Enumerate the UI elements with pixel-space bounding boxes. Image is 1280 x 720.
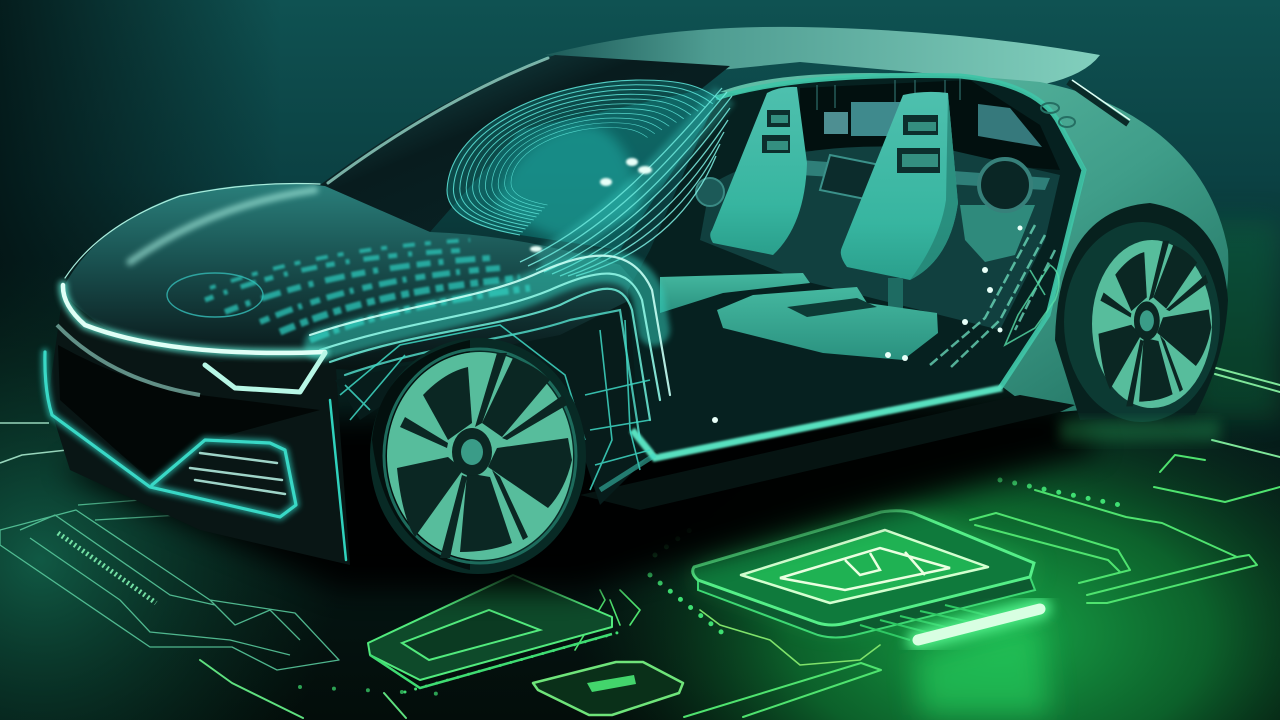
screen right	[978, 104, 1042, 147]
translucent dome of airflow	[447, 80, 732, 276]
sill	[580, 395, 1075, 510]
left outline drawing: mechanical part	[0, 423, 339, 670]
rear wheel arch and wheel	[1055, 203, 1228, 422]
grille louvres	[190, 453, 285, 494]
door frame	[716, 75, 1084, 388]
front wheel	[370, 338, 586, 574]
door circuitry	[930, 225, 1055, 368]
small chip outline	[533, 662, 683, 715]
light glow reflected below the bar	[915, 620, 1050, 715]
top wires	[817, 78, 960, 110]
headlight lamp	[205, 353, 325, 392]
front wiring around the wheel arch	[340, 320, 655, 490]
headlight and light strips	[45, 285, 346, 560]
dash console	[820, 155, 880, 200]
glowing light bar	[918, 608, 1040, 640]
headlight strip	[63, 285, 325, 353]
seat: right backrest	[841, 92, 958, 280]
dashboard	[700, 147, 1060, 330]
circuit traces on the floor	[200, 365, 1280, 718]
black grille	[58, 345, 320, 480]
roof and spoiler	[545, 27, 1100, 84]
floor reflection under rear wheel	[1060, 420, 1220, 442]
chrome trim under the hood	[57, 325, 200, 395]
seat: left cushion	[660, 273, 810, 313]
seat: left backrest	[710, 87, 807, 255]
tail glass outline	[1005, 265, 1059, 345]
screen middle	[851, 102, 906, 136]
body edge line	[330, 400, 346, 560]
rear vent and body detail	[1041, 80, 1130, 127]
bumper strip	[45, 352, 296, 517]
bumper strip glow	[45, 352, 296, 517]
hood highlight	[130, 190, 315, 262]
car shadow	[60, 400, 1100, 590]
right dash panel	[960, 205, 1035, 262]
interior cabin	[628, 75, 1086, 458]
sill frame	[632, 388, 1002, 458]
mottled engine texture over the hood	[167, 240, 530, 340]
main ribbon of wiring from hood to cabin	[310, 256, 670, 440]
large glowing processor	[693, 511, 1035, 640]
diagonal wire bundle	[520, 88, 732, 276]
sparkle lights	[530, 158, 1022, 423]
seat: stalk	[888, 278, 903, 310]
circuit dots	[300, 480, 1120, 695]
screen small	[824, 112, 848, 134]
rear quarter panel	[720, 73, 1228, 412]
gauge	[696, 178, 724, 206]
hood and windshield edge lines	[65, 58, 548, 278]
car body	[48, 27, 1228, 565]
headlight strip glow	[63, 285, 325, 353]
upper cabin black	[800, 80, 1060, 170]
front bumper	[48, 300, 350, 565]
seats	[660, 87, 958, 360]
engine bay	[335, 290, 660, 505]
windshield	[320, 55, 730, 232]
steering wheel	[979, 159, 1031, 211]
seat: right cushion	[717, 287, 938, 360]
hood	[62, 183, 650, 370]
green chip	[368, 575, 620, 692]
